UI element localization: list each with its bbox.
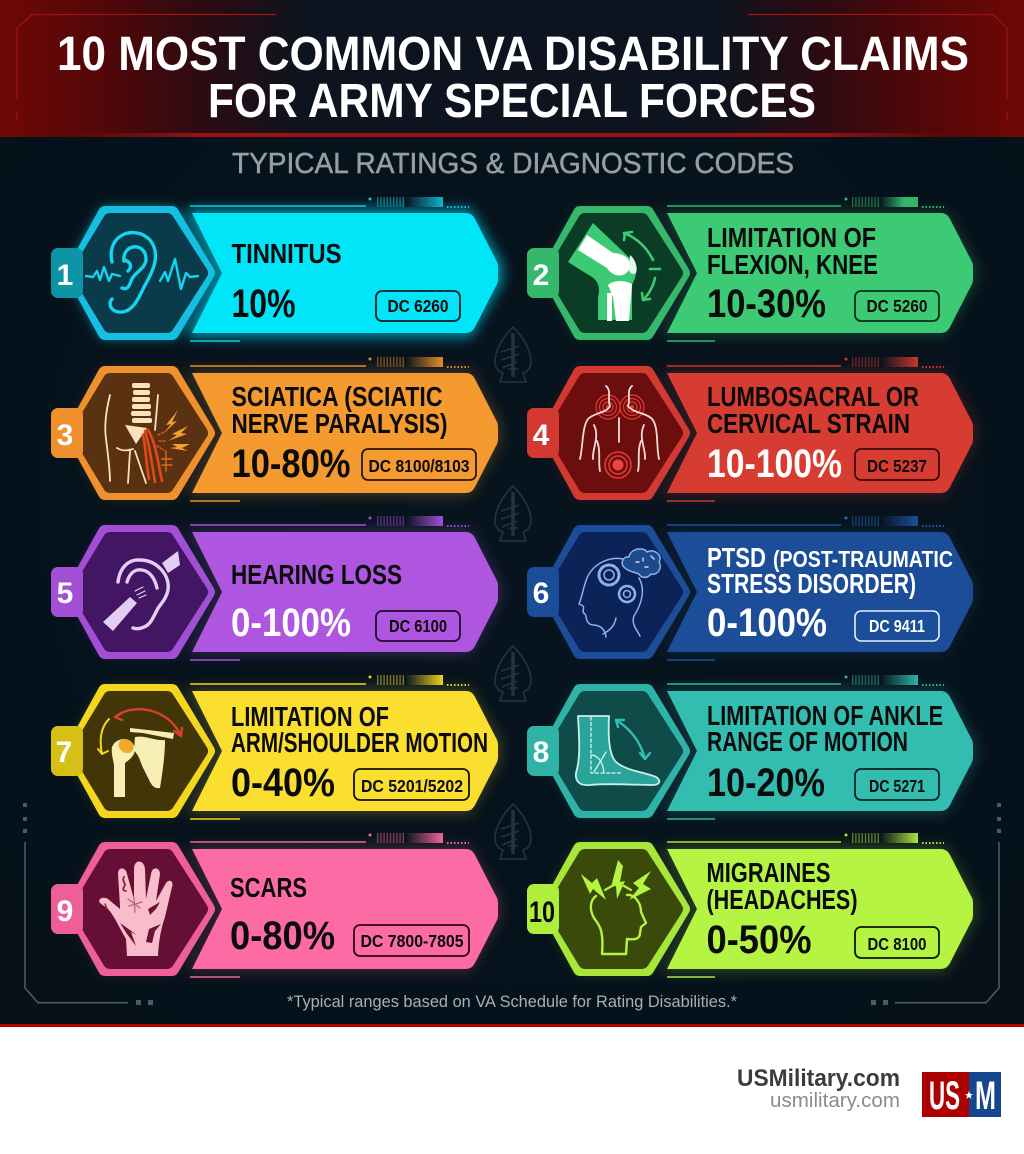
condition name: HEARING LOSS: [231, 559, 402, 590]
diagnostic code: [354, 925, 469, 956]
icon: head with gears and thought cloud: [579, 549, 660, 637]
icon: ear with sound waves: [86, 233, 198, 312]
hexagon icon badge: [547, 691, 683, 811]
title: 10 MOST COMMON VA DISABILITY CLAIMS: [57, 28, 969, 81]
brand logo: [922, 1072, 1001, 1118]
card 9: scars: [51, 833, 498, 977]
footnote: *Typical ranges based on VA Schedule for Rating Disabilities.*: [287, 992, 737, 1011]
number tab: 5: [57, 577, 73, 610]
condition name: [707, 700, 943, 757]
diagnostic code: [362, 449, 476, 480]
banner: [667, 691, 973, 811]
diagnostic code: [855, 927, 939, 958]
banner: [192, 373, 498, 493]
hexagon icon badge: [72, 373, 208, 493]
brand text: USMilitary.com: [737, 1065, 900, 1092]
red footer rule: [0, 1024, 1024, 1027]
number tab: 3: [57, 419, 73, 452]
arrowhead emblem 1: [495, 327, 531, 382]
number tab: [527, 408, 559, 458]
hexagon icon badge: [72, 691, 208, 811]
diagnostic code: [855, 291, 939, 321]
condition name: (POST-TRAUMATIC: [773, 546, 953, 572]
rating: 10-20%: [707, 761, 825, 805]
card 4: lumbosacral strain: [527, 357, 973, 501]
corner frame left: [23, 803, 153, 1005]
rating: 0-100%: [231, 601, 351, 645]
number tab: 8: [533, 736, 549, 769]
condition name: [231, 701, 488, 758]
condition name: MIGRAINES: [706, 857, 830, 888]
number tab: [51, 884, 83, 934]
card 8: ankle range of motion: [527, 675, 973, 819]
rating: 0-100%: [707, 601, 827, 645]
header banner: [0, 0, 1024, 137]
brand text: [737, 1065, 900, 1112]
hexagon icon badge: [547, 213, 683, 333]
condition name: LIMITATION OF: [231, 701, 389, 732]
condition name: LIMITATION OF: [707, 222, 876, 253]
number tab: 10: [529, 896, 555, 929]
condition name: ARM/SHOULDER MOTION: [231, 727, 488, 758]
diagnostic code: DC 6260: [388, 296, 449, 316]
number tab: [51, 726, 83, 776]
condition name: PTSD: [707, 542, 766, 573]
condition name: STRESS DISORDER): [707, 568, 916, 599]
corner frame right: [871, 803, 1001, 1005]
diagnostic code: [855, 611, 939, 641]
diagnostic code: DC 8100: [868, 934, 927, 954]
hexagon icon badge: [72, 213, 208, 333]
condition name: [232, 381, 448, 439]
icon: back with pain points: [580, 386, 659, 478]
icon: foot with angle arrow: [576, 716, 659, 785]
hexagon icon badge: [72, 849, 208, 969]
diagnostic code: DC 5271: [869, 776, 925, 796]
card 10: migraines: [527, 833, 973, 977]
icon: head with lightning bolts: [581, 860, 651, 954]
brand logo: M: [975, 1074, 996, 1118]
number tab: [51, 567, 83, 617]
number tab: [51, 248, 83, 298]
banner: [667, 373, 973, 493]
number tab: [527, 567, 559, 617]
banner: [192, 213, 498, 333]
diagnostic code: [855, 449, 939, 480]
rating: 0-40%: [231, 761, 335, 805]
card 6: PTSD: [527, 516, 973, 660]
rating: 10-30%: [707, 282, 826, 326]
number tab: 6: [533, 577, 549, 610]
condition name: LIMITATION OF ANKLE: [707, 700, 943, 731]
rating: 0-80%: [230, 914, 335, 958]
icon: spine and nerve: [105, 383, 190, 483]
icon: hearing loss ear with bar: [103, 551, 180, 631]
subtitle: TYPICAL RATINGS & DIAGNOSTIC CODES: [232, 148, 794, 180]
hexagon icon badge: [547, 532, 683, 652]
condition name: [707, 222, 878, 280]
hexagon icon badge: [72, 532, 208, 652]
condition name: [707, 381, 919, 439]
condition name: (HEADACHES): [706, 884, 858, 915]
arrowhead emblem 4: [495, 804, 531, 859]
rating: 10-100%: [707, 442, 842, 486]
card 1: tinnitus: [51, 197, 498, 341]
card 7: arm and shoulder: [51, 675, 498, 819]
condition name: SCARS: [230, 872, 307, 903]
condition name: LUMBOSACRAL OR: [707, 381, 919, 412]
diagnostic code: [855, 769, 939, 800]
diagnostic code: DC 6100: [389, 616, 447, 636]
diagnostic code: DC 5237: [867, 456, 927, 476]
number tab: [527, 726, 559, 776]
arrowhead emblem 3: [495, 646, 531, 701]
title: [57, 28, 969, 128]
diagnostic code: DC 9411: [869, 616, 925, 636]
card 5: hearing loss: [51, 516, 498, 660]
banner: [192, 532, 498, 652]
condition name: CERVICAL STRAIN: [707, 408, 910, 439]
diagnostic code: [376, 291, 460, 321]
icon: knee joint with arrows: [568, 223, 660, 321]
hexagon icon badge: [547, 373, 683, 493]
diagnostic code: DC 5201/5202: [361, 776, 463, 796]
diagnostic code: DC 5260: [866, 296, 928, 316]
diagnostic code: DC 7800-7805: [360, 931, 464, 951]
number tab: 4: [533, 419, 550, 452]
hexagon icon badge: [547, 849, 683, 969]
brand text: usmilitary.com: [770, 1090, 900, 1112]
condition name: [707, 542, 953, 599]
number tab: [527, 884, 559, 934]
condition name: NERVE PARALYSIS): [232, 408, 448, 439]
title: FOR ARMY SPECIAL FORCES: [208, 75, 816, 128]
diagnostic code: [354, 769, 469, 800]
condition name: TINNITUS: [232, 238, 342, 269]
brand logo: US: [929, 1074, 960, 1118]
rating: 10-80%: [232, 442, 350, 486]
number tab: [51, 408, 83, 458]
condition name: RANGE OF MOTION: [707, 726, 908, 757]
card 2: knee flexion: [527, 197, 973, 341]
banner: [667, 213, 973, 333]
number tab: [527, 248, 559, 298]
diagnostic code: [376, 611, 460, 641]
arrowhead emblem 2: [495, 486, 531, 541]
condition name: FLEXION, KNEE: [707, 249, 878, 280]
diagnostic code: DC 8100/8103: [368, 456, 470, 476]
banner: [192, 849, 498, 969]
card 3: sciatica: [51, 357, 498, 501]
banner: [192, 691, 498, 811]
rating: 10%: [232, 282, 296, 326]
banner: [667, 532, 973, 652]
icon: scarred hand: [99, 862, 173, 956]
number tab: 1: [57, 259, 73, 292]
icon: shoulder joint with arrows: [98, 709, 182, 797]
banner: [667, 849, 973, 969]
number tab: 2: [533, 259, 549, 292]
condition name: SCIATICA (SCIATIC: [232, 381, 442, 412]
condition name: [706, 857, 858, 915]
number tab: 7: [56, 736, 72, 769]
rating: 0-50%: [706, 918, 812, 962]
number tab: 9: [57, 895, 73, 928]
